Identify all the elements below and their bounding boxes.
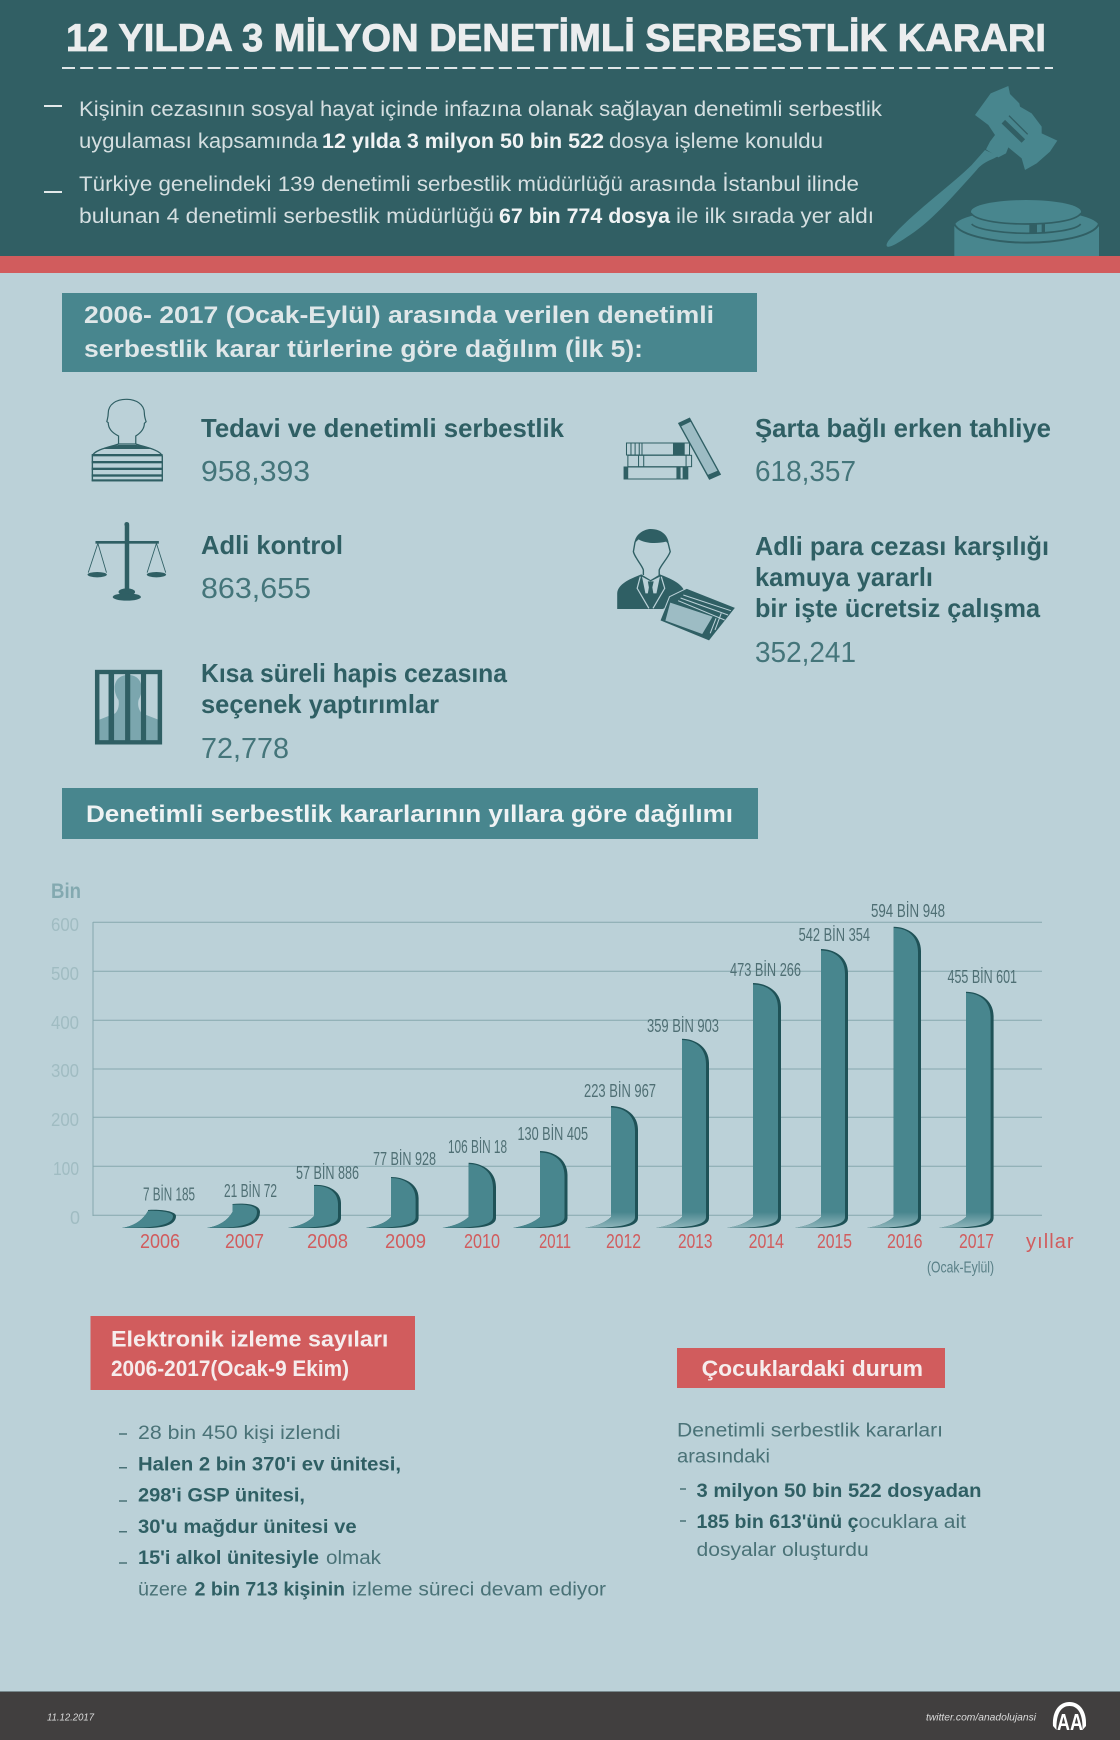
icon: scales (88, 522, 166, 601)
list: monitoring figures: olmak (326, 1548, 382, 1569)
bar 2008: 57 BİN 886 (296, 1163, 359, 1183)
bar chart (51, 880, 1074, 1277)
y axis labels: 400 (51, 1013, 79, 1033)
bar 2014 (727, 960, 801, 1253)
text block: children figures: 185 bin 613'ünü ç (696, 1512, 859, 1533)
list: monitoring figures: 30'u mağdur ünitesi ve (138, 1517, 357, 1538)
panel: header (0, 0, 1120, 273)
bar 2010: 2010 (464, 1231, 500, 1253)
text block: second bullet: ile ilk sırada yer aldı (676, 205, 874, 228)
y axis labels: 500 (51, 964, 79, 984)
date: 11.12.2017 (47, 1713, 94, 1724)
text block: children figures: dosyalar oluşturdu (696, 1540, 869, 1561)
bar 2016: 2016 (887, 1231, 922, 1253)
bar 2013: 2013 (678, 1231, 712, 1253)
bar 2012: 2012 (606, 1231, 641, 1253)
icon: books (624, 418, 720, 479)
y axis labels (51, 915, 80, 1228)
list: monitoring figures (119, 1423, 607, 1601)
bar 2014: 2014 (749, 1231, 784, 1253)
list: monitoring figures: 28 bin 450 kişi izlendi (138, 1423, 341, 1444)
footer (0, 1691, 1120, 1740)
bar 2016: 594 BİN 948 (871, 901, 945, 921)
text block: second bullet: bulunan 4 denetimli serbestlik müdürlüğü (79, 205, 494, 228)
bar 2011 (513, 1124, 588, 1253)
bar 2015: 2015 (817, 1231, 852, 1253)
bar 2015 (795, 925, 870, 1253)
icon: prisoner behind bars (97, 672, 160, 743)
bar 2007 (207, 1181, 277, 1253)
bar 2016 (867, 901, 945, 1253)
bar 2017 (939, 967, 1017, 1253)
item: judicial control (88, 522, 343, 605)
y axis labels: 0 (70, 1208, 80, 1228)
panel heading: distribution by year (62, 788, 758, 839)
item: community service: bir işte ücretsiz çalışma (755, 593, 1041, 623)
bar 2012: 223 BİN 967 (584, 1081, 656, 1101)
item: community service (617, 529, 1049, 669)
bar 2012 (584, 1081, 656, 1253)
bar 2017: 2017 (959, 1231, 994, 1253)
list: monitoring figures: 2 bin 713 kişinin (195, 1580, 345, 1601)
icon: man with banknotes (617, 529, 736, 641)
bar 2006: 2006 (140, 1231, 180, 1253)
bar 2015: 542 BİN 354 (799, 925, 870, 945)
icon: agency logo: AA (1057, 1709, 1083, 1735)
panel: children (677, 1348, 982, 1561)
bar 2017: 455 BİN 601 (948, 967, 1017, 987)
panel heading: decision types (62, 293, 757, 372)
bar 2013 (647, 1016, 719, 1253)
text block: first bullet: 12 yılda 3 milyon 50 bin 522 (322, 130, 604, 153)
item: treatment: 958,393 (201, 456, 310, 488)
bar 2010 (442, 1137, 507, 1253)
bar 2011: 2011 (539, 1231, 571, 1253)
item: short prison alternatives: 72,778 (201, 733, 289, 765)
text block: second bullet (44, 173, 874, 228)
panel: electronic monitoring (90, 1316, 607, 1601)
item: short prison alternatives: Kısa süreli hapis cezasına (201, 658, 508, 688)
y axis labels: 200 (51, 1110, 79, 1130)
heading: children (677, 1348, 945, 1388)
bar 2011: 130 BİN 405 (518, 1124, 588, 1144)
panel heading: decision types: 2006- 2017 (Ocak-Eylül) arasında verilen denetimli (84, 302, 714, 329)
text block: first bullet (44, 98, 883, 153)
heading: electronic monitoring: Elektronik izleme sayıları (111, 1327, 388, 1352)
list: monitoring figures: üzere (138, 1580, 188, 1601)
text block: first bullet: uygulaması kapsamında (79, 130, 318, 153)
text block: first bullet: Kişinin cezasının sosyal hayat içinde infazına olanak sağlayan denetimli serbestlik (79, 98, 883, 121)
text block: children figures (677, 1421, 982, 1561)
item: treatment: Tedavi ve denetimli serbestlik (201, 413, 565, 443)
item: conditional early release: Şarta bağlı erken tahliye (755, 413, 1051, 443)
y axis labels: 300 (51, 1061, 79, 1081)
text block: children figures: ocuklara ait (858, 1512, 967, 1533)
bar 2013: 359 BİN 903 (647, 1016, 719, 1036)
text block: second bullet: 67 bin 774 dosya (499, 205, 670, 228)
text block: first bullet: dosya işleme konuldu (609, 130, 823, 153)
item: short prison alternatives (97, 658, 508, 765)
list: monitoring figures: Halen 2 bin 370'i ev ünitesi, (138, 1455, 401, 1476)
note under 2017: (Ocak-Eylül) (927, 1260, 994, 1277)
text block: second bullet: Türkiye genelindeki 139 denetimli serbestlik müdürlüğü arasında İstanbul ilinde (79, 173, 859, 196)
bar 2009 (366, 1149, 436, 1253)
bar 2010: 106 BİN 18 (448, 1137, 507, 1157)
title: 12 YILDA 3 MİLYON DENETİMLİ SERBESTLİK KARARI (66, 17, 1046, 60)
list: monitoring figures: 15'i alkol ünitesiyle (138, 1548, 319, 1569)
bar 2007: 21 BİN 72 (224, 1181, 277, 1201)
item: conditional early release: 618,357 (755, 456, 856, 488)
bar 2009: 77 BİN 928 (373, 1149, 436, 1169)
icon: striped prisoner (92, 399, 163, 481)
item: community service: kamuya yararlı (755, 562, 933, 592)
bar 2008 (288, 1163, 359, 1253)
y axis labels: 600 (51, 915, 79, 935)
source handle: twitter.com/anadolujansi (926, 1712, 1037, 1724)
panel heading: decision types: serbestlik karar türlerine göre dağılım (İlk 5): (84, 336, 643, 363)
heading: children: Çocuklardaki durum (702, 1356, 923, 1381)
item: judicial control: Adli kontrol (201, 530, 343, 560)
y axis unit: Bin (51, 880, 81, 903)
icon: agency logo (1053, 1702, 1086, 1735)
x axis unit: yıllar (1026, 1231, 1074, 1253)
item: treatment (92, 399, 565, 488)
item: community service: Adli para cezası karşılığı (755, 531, 1049, 561)
panel heading: distribution by year: Denetimli serbestlik kararlarının yıllara göre dağılımı (86, 801, 733, 828)
bar 2014: 473 BİN 266 (730, 960, 801, 980)
item: community service: 352,241 (755, 637, 856, 669)
list: monitoring figures: 298'i GSP ünitesi, (138, 1486, 305, 1507)
heading: electronic monitoring: 2006-2017(Ocak-9 Ekim) (111, 1356, 349, 1381)
icon: gavel (887, 86, 1099, 256)
bar 2006 (122, 1184, 195, 1253)
text block: children figures: 3 milyon 50 bin 522 dosyadan (696, 1481, 982, 1502)
bar 2008: 2008 (307, 1231, 348, 1253)
bar 2006: 7 BİN 185 (143, 1184, 195, 1204)
list: monitoring figures: izleme süreci devam ediyor (352, 1580, 607, 1601)
heading: electronic monitoring (90, 1316, 415, 1390)
item: conditional early release (624, 413, 1051, 488)
item: short prison alternatives: seçenek yaptırımlar (201, 689, 439, 719)
item: judicial control: 863,655 (201, 573, 311, 605)
y axis labels: 100 (53, 1159, 79, 1179)
text block: children figures: arasındaki (677, 1447, 770, 1468)
bar 2009: 2009 (385, 1231, 426, 1253)
text block: children figures: Denetimli serbestlik kararları (677, 1421, 943, 1442)
bar 2007: 2007 (225, 1231, 264, 1253)
